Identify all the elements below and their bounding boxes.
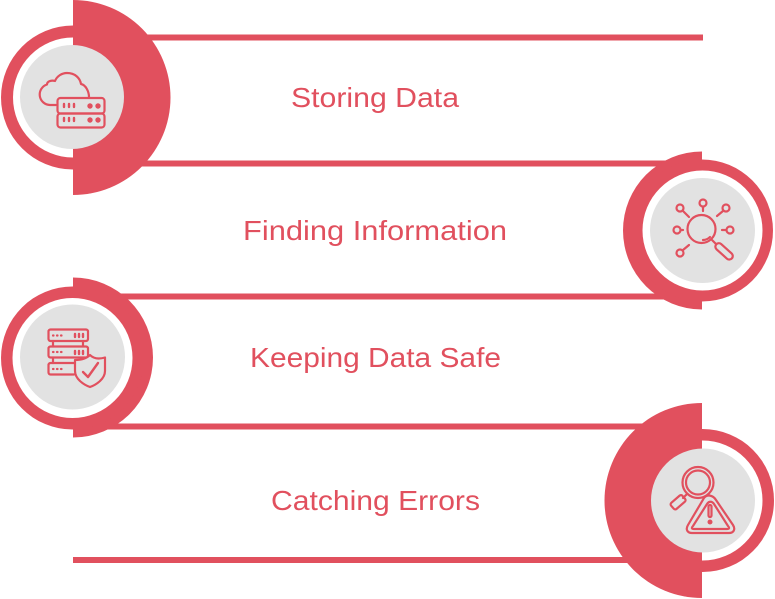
step 4: catching errors badge: [604, 403, 774, 598]
icon: magnifier with warning triangle: [670, 467, 734, 533]
step 3 label: Keeping Data Safe: [250, 342, 501, 373]
icon: magnifier with nodes: [674, 200, 734, 261]
step 1 label: Storing Data: [291, 82, 459, 113]
step 3: keeping data safe badge: [1, 278, 153, 438]
icon: servers with shield: [48, 330, 105, 387]
icon: cloud and servers: [40, 73, 104, 128]
step 2 label: Finding Information: [243, 215, 507, 246]
connector lines: [73, 34, 703, 563]
step 1: storing data badge: [1, 0, 170, 195]
step 4 label: Catching Errors: [271, 485, 480, 516]
step 2: finding information badge: [623, 152, 773, 310]
